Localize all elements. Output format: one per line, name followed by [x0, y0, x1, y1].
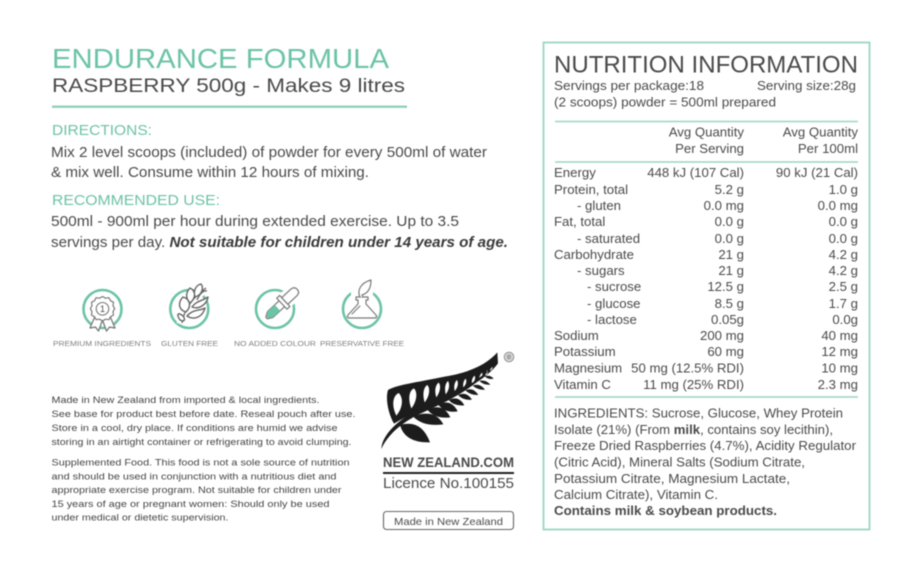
ingredients: (Citric Acid), Mineral Salts (Sodium Citrate, — [554, 454, 805, 470]
nutrition table rows: Energy — [554, 165, 596, 180]
serving info: (2 scoops) powder = 500ml prepared — [554, 94, 776, 110]
ingredients: Calcium Citrate), Vitamin C. — [554, 487, 718, 502]
icon labels: PRESERVATIVE FREE — [320, 339, 404, 348]
supplemented food text: under medical or dietetic supervision. — [52, 512, 228, 524]
icon labels — [53, 339, 404, 348]
supplemented food text: Supplemented Food. This food is not a sole source of nutrition — [52, 458, 350, 468]
nutrition table rows: 0.0 g — [829, 214, 858, 229]
nutrition table rows: 5.2 g — [715, 182, 744, 197]
badge: made in new zealand: Made in New Zealand — [394, 516, 503, 528]
icon: silver fern — [381, 352, 498, 449]
nutrition table rows: Magnesium — [554, 360, 622, 376]
nutrition table rows: 200 mg — [700, 328, 744, 343]
nutrition table rows: 10 mg — [821, 360, 858, 376]
nutrition table rows: 4.2 g — [829, 247, 858, 262]
nutrition table rows: 0.05g — [711, 312, 744, 327]
nutrition table rows: - glucose — [587, 296, 641, 311]
nutrition table rows: Fat, total — [554, 214, 605, 229]
nutrition table rows: 2.5 g — [829, 279, 858, 294]
directions: & mix well. Consume within 12 hours of mixing. — [51, 164, 369, 181]
nutrition table rows: - saturated — [577, 231, 640, 246]
nutrition table rows — [554, 165, 858, 392]
ingredients — [554, 406, 857, 518]
table header — [555, 122, 858, 162]
recommended use: RECOMMENDED USE: — [52, 192, 220, 209]
registered mark — [504, 352, 514, 362]
panel: nutrition information — [544, 42, 870, 530]
ingredients: Potassium Citrate, Magnesium Lactate, — [554, 471, 790, 486]
supplemented food text — [52, 458, 350, 524]
icon: premium ingredients — [84, 290, 122, 331]
nutrition table rows: 448 kJ (107 Cal) — [647, 165, 744, 180]
recommended use: 500ml - 900ml per hour during extended exercise. Up to 3.5 — [51, 213, 459, 230]
nutrition table rows: 60 mg — [707, 344, 744, 359]
nutrition table rows: 21 g — [718, 247, 744, 262]
ingredients: Isolate (21%) (From milk, contains soy lecithin), — [554, 422, 833, 437]
supplemented food text: 15 years of age or pregnant women: Should only be used — [52, 499, 330, 510]
new zealand com logotype: NEW ZEALAND.COM — [383, 454, 514, 470]
storage text: See base for product best before date. Reseal pouch after use. — [52, 409, 356, 420]
directions: DIRECTIONS: — [52, 122, 152, 139]
nutrition table rows: 8.5 g — [715, 296, 744, 311]
nutrition table rows: 21 g — [718, 263, 744, 278]
title rule — [52, 106, 407, 108]
subtitle: RASPBERRY 500g - Makes 9 litres — [52, 76, 405, 97]
serving info: Servings per package:18 — [554, 78, 704, 93]
directions: Mix 2 level scoops (included) of powder for every 500ml of water — [51, 144, 487, 161]
ingredients: Freeze Dried Raspberries (4.7%), Acidity Regulator — [554, 438, 857, 453]
nutrition table rows: Carbohydrate — [554, 247, 634, 262]
nutrition table rows: 0.0 mg — [704, 198, 744, 213]
storage text — [52, 395, 356, 448]
table header: Per Serving — [675, 141, 744, 156]
storage text: Store in a cool, dry place. If conditions are humid we advise — [52, 423, 338, 434]
supplemented food text: and should be used in conjunction with a nutritious diet and — [52, 472, 336, 482]
nutrition table rows: 2.3 mg — [818, 377, 858, 392]
nutrition table rows: 90 kJ (21 Cal) — [776, 165, 858, 180]
storage text: storing in an airtight container or refrigerating to avoid clumping. — [52, 437, 352, 448]
nutrition table rows: Potassium — [554, 344, 616, 359]
icon: premium ingredients: 1 — [100, 304, 105, 314]
directions — [51, 122, 487, 181]
ingredients: INGREDIENTS: Sucrose, Glucose, Whey Protein — [554, 406, 843, 420]
nutrition heading: NUTRITION INFORMATION — [554, 52, 858, 78]
icon labels: NO ADDED COLOUR — [234, 339, 316, 348]
nutrition table rows: 0.0 mg — [818, 198, 858, 213]
recommended use: servings per day. Not suitable for children under 14 years of age. — [51, 234, 508, 251]
table header: Per 100ml — [798, 141, 858, 156]
nutrition table rows: 1.0 g — [829, 182, 858, 197]
table header: Avg Quantity — [783, 124, 858, 140]
nutrition table rows: Protein, total — [554, 182, 628, 197]
table header: Avg Quantity — [669, 124, 744, 140]
serving info — [554, 78, 856, 110]
new zealand com logotype — [383, 454, 514, 492]
nutrition table rows: 12.5 g — [707, 279, 744, 294]
nutrition table rows: 11 mg (25% RDI) — [643, 377, 744, 392]
serving info: Serving size:28g — [757, 78, 856, 93]
nutrition table rows: - gluten — [577, 198, 621, 213]
icon: gluten free — [170, 284, 208, 328]
new zealand com logotype: Licence No.100155 — [383, 476, 514, 492]
recommended use — [51, 192, 508, 251]
nutrition table rows: 0.0 g — [829, 231, 858, 246]
supplemented food text: appropriate exercise program. Not suitable for children under — [52, 485, 342, 496]
badge: made in new zealand — [384, 512, 514, 530]
nutrition table rows: - lactose — [587, 312, 637, 327]
nutrition table rows: 0.0g — [832, 312, 858, 327]
nutrition table rows: 4.2 g — [829, 263, 858, 278]
nutrition table rows: - sugars — [577, 263, 625, 278]
nutrition table rows: 0.0 g — [715, 231, 744, 246]
ingredients: Contains milk & soybean products. — [554, 503, 777, 518]
icon labels: PREMIUM INGREDIENTS — [53, 339, 151, 348]
nutrition table rows: - sucrose — [587, 279, 641, 294]
icon labels: GLUTEN FREE — [161, 339, 218, 348]
title: ENDURANCE FORMULA — [52, 43, 389, 74]
nutrition table rows: 50 mg (12.5% RDI) — [631, 360, 744, 376]
icon: preservative free — [343, 280, 381, 328]
registered mark: ® — [507, 354, 512, 362]
nutrition table rows: 1.7 g — [829, 296, 858, 311]
nutrition table rows: 12 mg — [821, 344, 858, 359]
nutrition table rows: 0.0 g — [715, 214, 744, 229]
nutrition table rows: Sodium — [554, 328, 599, 343]
nutrition table rows: Vitamin C — [554, 377, 611, 392]
icon: no added colour — [256, 282, 304, 328]
nutrition table rows: 40 mg — [821, 328, 858, 343]
storage text: Made in New Zealand from imported & local ingredients. — [52, 395, 320, 406]
